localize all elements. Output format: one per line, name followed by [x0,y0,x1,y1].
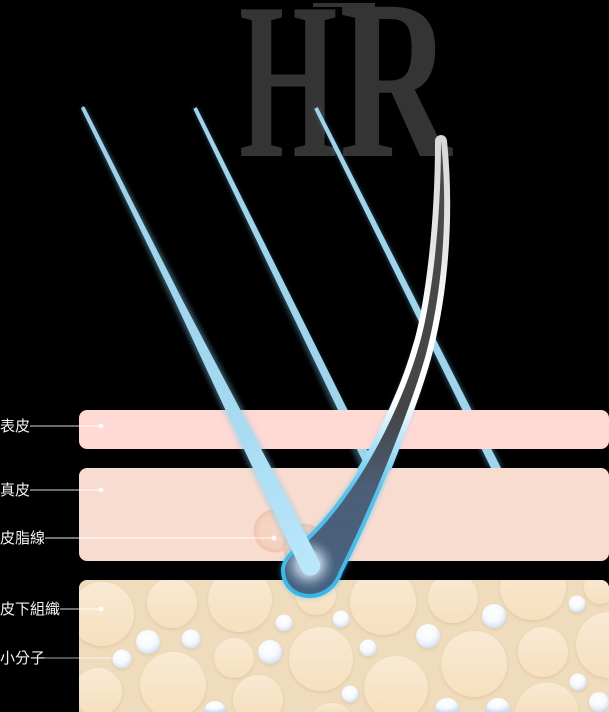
layer: dermis [79,468,609,561]
light beam 2 (behind skin) [193,107,375,468]
hair inner core [285,141,444,594]
label: sebaceous gland [0,530,276,547]
label: subcutaneous tissue: 皮下組織 [0,601,60,618]
light beam 3 (behind skin) [314,107,503,468]
label: small molecules: 小分子 [0,650,45,667]
light beam 1 glow [81,107,322,570]
logo: HR monogram [239,0,453,206]
label: small molecules [0,650,116,667]
label: epidermis [0,418,104,435]
label: dermis: 真皮 [0,481,30,499]
label: sebaceous gland: 皮脂線 [0,530,45,547]
sebaceous gland [254,510,327,568]
bulb glow [286,540,333,588]
label: subcutaneous tissue [0,601,104,618]
layer: subcutaneous tissue [79,580,609,712]
label: dermis [0,481,104,499]
small molecules [112,596,609,712]
fat cells [79,580,609,712]
label: epidermis: 表皮 [0,418,30,435]
layer: epidermis [79,410,609,449]
light beam 1 core [81,106,320,576]
hair follicle and shaft [283,141,444,594]
